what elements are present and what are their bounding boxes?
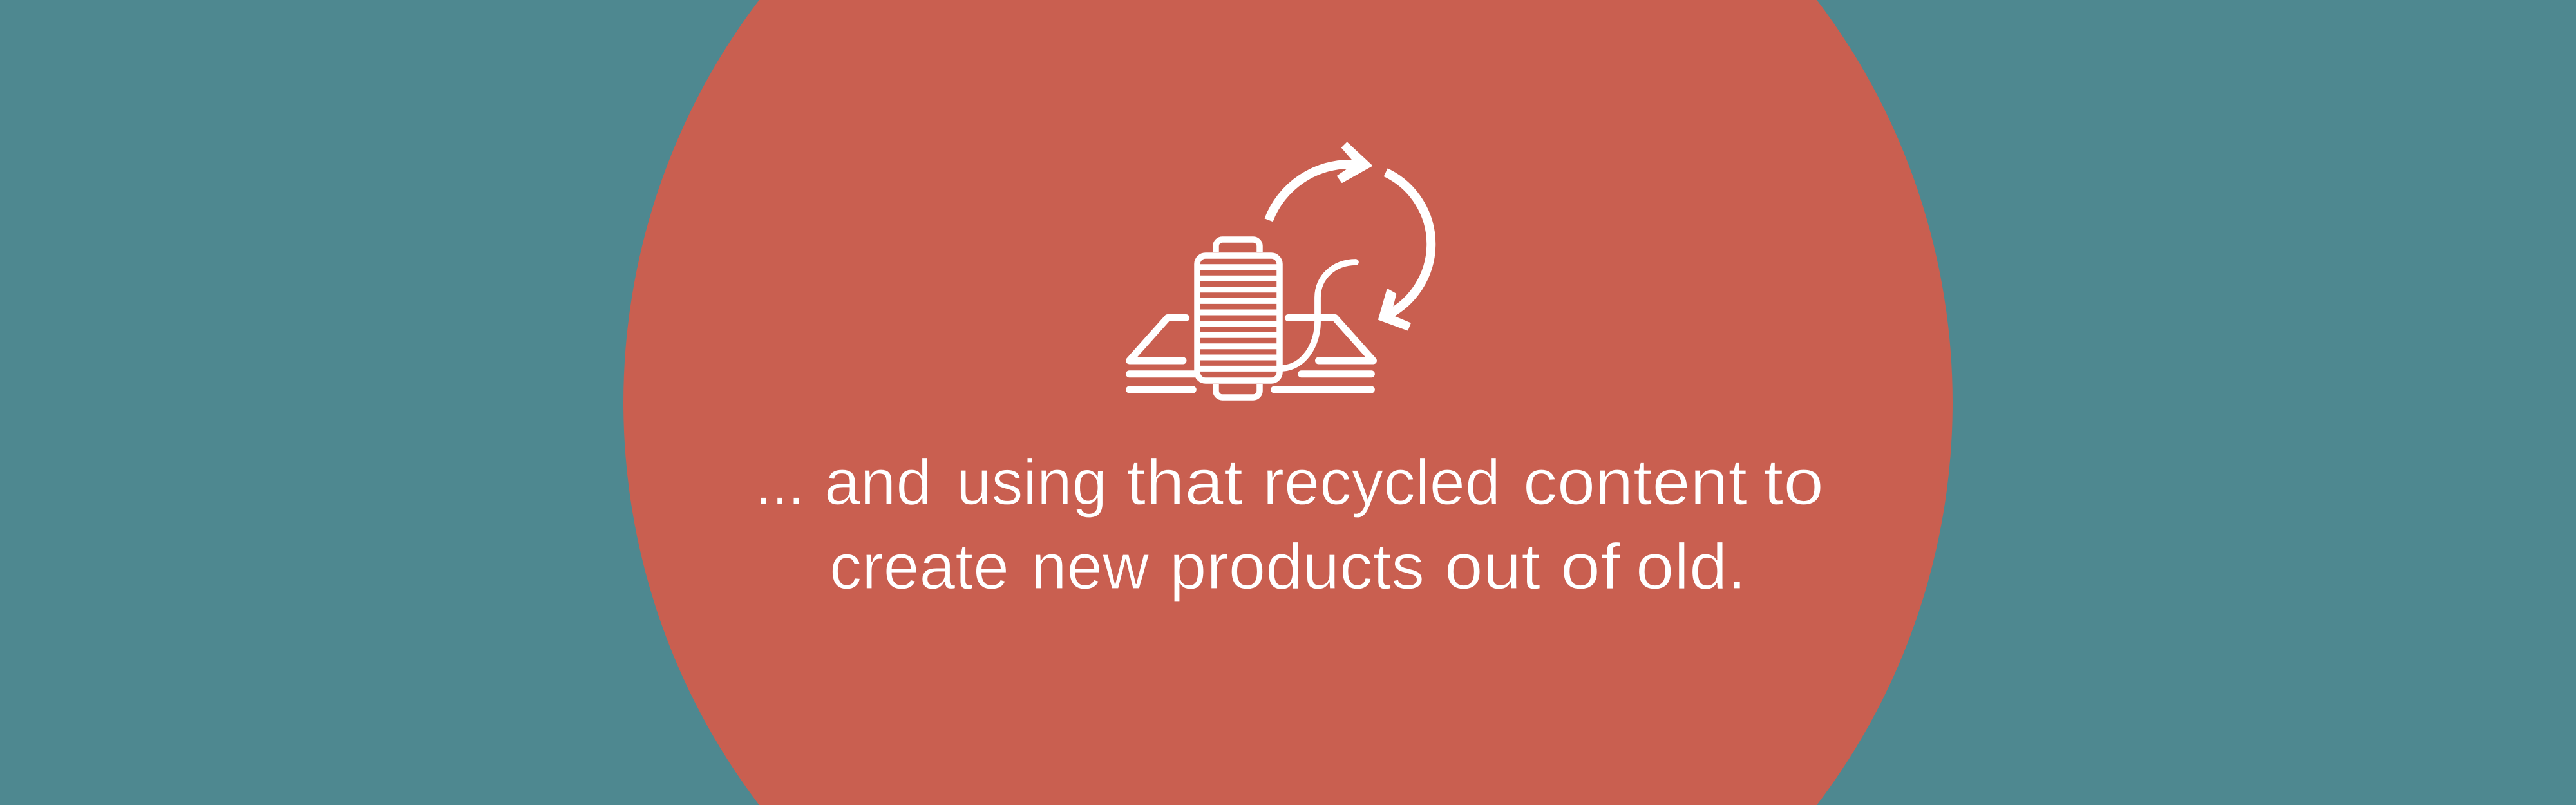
caption text: and (824, 446, 932, 518)
icon: fabric left (1130, 318, 1195, 390)
caption text: content (1523, 446, 1747, 518)
caption text (755, 446, 1824, 603)
caption text: out (1444, 531, 1540, 603)
caption text: create (829, 531, 1009, 603)
icon: thread spool on fabric with recycling arrows (1130, 143, 1431, 397)
caption text: that (1126, 446, 1243, 518)
caption text: to (1763, 446, 1824, 518)
caption text: using (956, 446, 1107, 518)
icon: spool body (1197, 240, 1280, 397)
caption text: old. (1636, 531, 1747, 603)
caption text: ... (755, 446, 804, 518)
caption text: new (1031, 531, 1150, 603)
caption text: recycled (1263, 446, 1501, 518)
icon: lower arrow (1379, 173, 1431, 330)
icon: thread (1282, 262, 1356, 368)
icon: fabric right (1274, 318, 1373, 390)
caption text: of (1560, 531, 1620, 603)
caption text: products (1170, 531, 1425, 603)
icon: upper arrow (1269, 143, 1372, 220)
central circle (623, 0, 1953, 805)
